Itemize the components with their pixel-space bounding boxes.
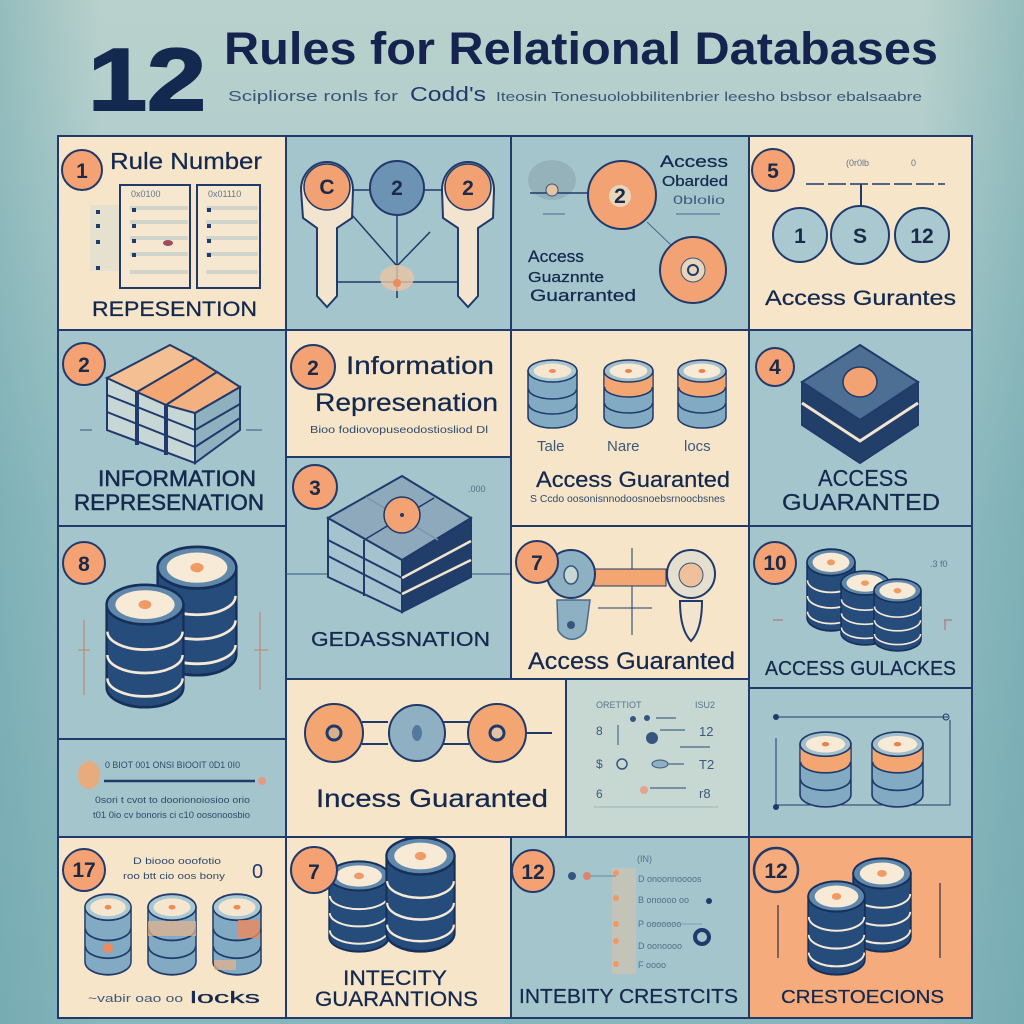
label: GUARANTIONS	[315, 988, 478, 1011]
table contents: $	[596, 757, 603, 771]
label: Access Guaranted	[528, 648, 735, 675]
table contents: 6	[596, 787, 603, 801]
label: INTECITY	[343, 967, 447, 990]
cylinder labels: locs	[684, 438, 711, 455]
label	[782, 465, 940, 515]
icon: cylinders	[528, 360, 726, 428]
panel: connected keys	[511, 526, 749, 679]
label: Incess Guaranted	[316, 785, 548, 813]
label: INFORMATION	[98, 466, 256, 491]
panel: blurred table	[566, 679, 749, 837]
icon: three nodes: S	[853, 225, 867, 248]
heading: Rules for Relational Databases	[224, 23, 938, 74]
cylinder labels: Tale	[537, 438, 565, 455]
badge 1: 1	[76, 160, 88, 183]
panel: three lock cylinders: locks	[190, 988, 260, 1007]
text lines	[93, 795, 250, 820]
side markers	[778, 883, 940, 958]
badge 2	[63, 343, 105, 385]
text lines: t01 0io cv bonoris ci c10 oosonoosbio	[93, 810, 250, 820]
icon: layered slab	[328, 476, 471, 612]
badge 10	[754, 542, 796, 584]
badge 4: 4	[769, 356, 781, 379]
badge 2: 2	[78, 354, 90, 377]
panel: progress note	[58, 739, 286, 837]
panel: access gulackes	[749, 526, 972, 688]
panel: three lock cylinders	[58, 837, 286, 1018]
table icon: 0x0100	[131, 189, 161, 199]
panel: rule 1 representation	[58, 136, 286, 330]
panel: orange top cylinders	[749, 688, 972, 837]
icon: left key	[301, 162, 353, 307]
badge 2: 2	[307, 357, 319, 380]
heading: Represenation	[315, 389, 498, 417]
badge 12	[512, 850, 554, 892]
text: lower left: Guaznnte	[528, 269, 604, 286]
badge 7: 7	[308, 861, 320, 884]
label: ~vabir oao oo	[88, 993, 183, 1005]
icon: ring	[695, 930, 709, 944]
panel: access guaranted slab	[749, 330, 972, 526]
icon: database pair	[808, 858, 911, 975]
label: CRESTOECIONS	[781, 987, 944, 1007]
blurred list	[568, 854, 712, 974]
panel: access guarantees: (0r0lb	[846, 158, 869, 168]
heading: Access Guaranted	[536, 467, 730, 492]
badge 7	[291, 847, 337, 893]
table contents: ORETTIOT	[596, 700, 642, 710]
panel: access guaranteed nodes	[511, 136, 749, 330]
big number 12: 12	[88, 30, 206, 129]
text: lower left: Access	[528, 247, 584, 266]
icon: right key	[442, 162, 494, 307]
text: lower left	[528, 247, 636, 305]
icon: three nodes	[773, 206, 949, 264]
caption: S Ccdo oosonisnnodoosnoebsrnoocbsnes	[530, 494, 725, 505]
icon: key bar	[547, 550, 715, 641]
subtitle: Codd's	[410, 84, 486, 106]
table contents: 12	[699, 724, 713, 739]
label: Access Gurantes	[765, 287, 956, 310]
panel: access gulackes: .3 f0	[930, 559, 948, 569]
table contents: ISU2	[695, 700, 715, 710]
table contents: T2	[699, 757, 714, 772]
icon: middle node	[370, 161, 424, 215]
icon: orange node: 2	[614, 185, 626, 208]
icon: orange marker	[78, 761, 100, 789]
blurred list: (IN)	[637, 854, 652, 864]
icon: left key: C	[319, 176, 335, 199]
badge 8	[63, 542, 105, 584]
panel: slab representation	[286, 457, 511, 679]
icon: orange node	[588, 161, 656, 229]
connector lines	[327, 190, 470, 298]
badge 12: 12	[764, 860, 788, 883]
icon: middle node: 2	[391, 177, 403, 200]
badge 3: 3	[309, 477, 321, 500]
text: top right: Access	[660, 152, 728, 171]
heading	[315, 352, 498, 417]
table contents	[594, 700, 718, 807]
table contents: r8	[699, 786, 711, 801]
badge 8: 8	[78, 553, 90, 576]
table contents: 8	[596, 724, 603, 738]
blurred list: D oonoooo	[638, 941, 682, 951]
icon: right key: 2	[462, 177, 474, 200]
progress line	[104, 777, 266, 785]
blurred list: B onoooo oo	[638, 895, 689, 905]
panel: information representation	[58, 330, 286, 526]
icon: database group	[807, 549, 921, 651]
text line: 0 BIOT 001 ONSI BIOOIT 0D1 0I0	[105, 760, 240, 770]
panel: orange constraints	[749, 837, 972, 1018]
label: INTEBITY CRESTCITS	[519, 986, 738, 1008]
caption	[123, 856, 263, 883]
badge 2	[291, 345, 335, 389]
caption: D biooo ooofotio	[133, 856, 221, 866]
icon: large database	[107, 547, 236, 707]
table icon	[90, 185, 260, 288]
caption: roo btt cio oos bony	[123, 871, 226, 881]
text: top right: 0blolio	[673, 193, 725, 207]
caption: 0	[252, 861, 263, 883]
cylinder labels	[537, 438, 711, 455]
icon: lower node	[660, 237, 726, 303]
blurred list: F oooo	[638, 960, 666, 970]
subtitle: Scipliorse ronls for	[228, 88, 398, 105]
badge 4	[756, 348, 794, 386]
text: top right	[660, 152, 728, 207]
badge 10: 10	[763, 552, 787, 575]
icon: stacked blocks	[107, 345, 240, 463]
icon: three nodes: 12	[910, 225, 934, 248]
badge 12	[754, 848, 798, 892]
icon: slab stack	[802, 345, 918, 463]
table icon: 0x01110	[208, 189, 241, 199]
badge 5	[752, 149, 794, 191]
heading: Information	[346, 352, 494, 380]
badge 12: 12	[521, 861, 545, 884]
label: GEDASSNATION	[311, 629, 490, 651]
caption: Bioo fodiovopuseodostiosliod Dl	[310, 425, 488, 436]
panel: integrity guarantees	[286, 837, 511, 1018]
label	[74, 466, 264, 515]
blurred list: D onoonnoooos	[638, 874, 702, 884]
frame lines	[776, 717, 950, 805]
title	[88, 23, 938, 129]
cylinder labels: Nare	[607, 438, 640, 455]
badge 7	[516, 541, 558, 583]
icon: cylinders	[85, 894, 261, 975]
badge 1	[62, 150, 102, 190]
panel: access guarantees	[749, 136, 972, 330]
label: ACCESS	[818, 465, 908, 491]
blurred list: P ooooooo	[638, 919, 681, 929]
icon: three nodes	[305, 704, 526, 762]
subtitle: Iteosin Tonesuolobbilitenbrier leesho bsbsor ebalsaabre	[496, 89, 922, 104]
icon: cylinders	[800, 732, 923, 807]
badge 17	[63, 849, 105, 891]
label: REPRESENATION	[74, 490, 264, 515]
label	[315, 967, 478, 1011]
badge 7: 7	[531, 552, 543, 575]
panel: slab representation: .000	[468, 484, 486, 494]
icon: database pair	[329, 838, 455, 952]
text lines: 0sori t cvot to doorionoiosioo orio	[95, 795, 250, 805]
heading: Rule Number	[110, 148, 262, 174]
label: ACCESS GULACKES	[765, 658, 956, 680]
badge 3	[293, 465, 337, 509]
badge 17: 17	[72, 859, 96, 882]
label: GUARANTED	[782, 489, 940, 515]
badge 5: 5	[767, 160, 779, 183]
text: top right: Obarded	[662, 173, 728, 190]
panel: keys	[286, 136, 511, 330]
icon: three nodes: 1	[794, 225, 806, 248]
text: lower left: Guarranted	[530, 286, 636, 305]
panel: information heading	[286, 330, 511, 457]
panel: three tables	[511, 330, 749, 526]
panel: database stack	[58, 526, 286, 739]
label: REPESENTION	[92, 298, 257, 321]
panel: incess guaranted	[286, 679, 566, 837]
panel: access guarantees: 0	[911, 158, 916, 168]
panel: integrity constraints	[511, 837, 749, 1018]
